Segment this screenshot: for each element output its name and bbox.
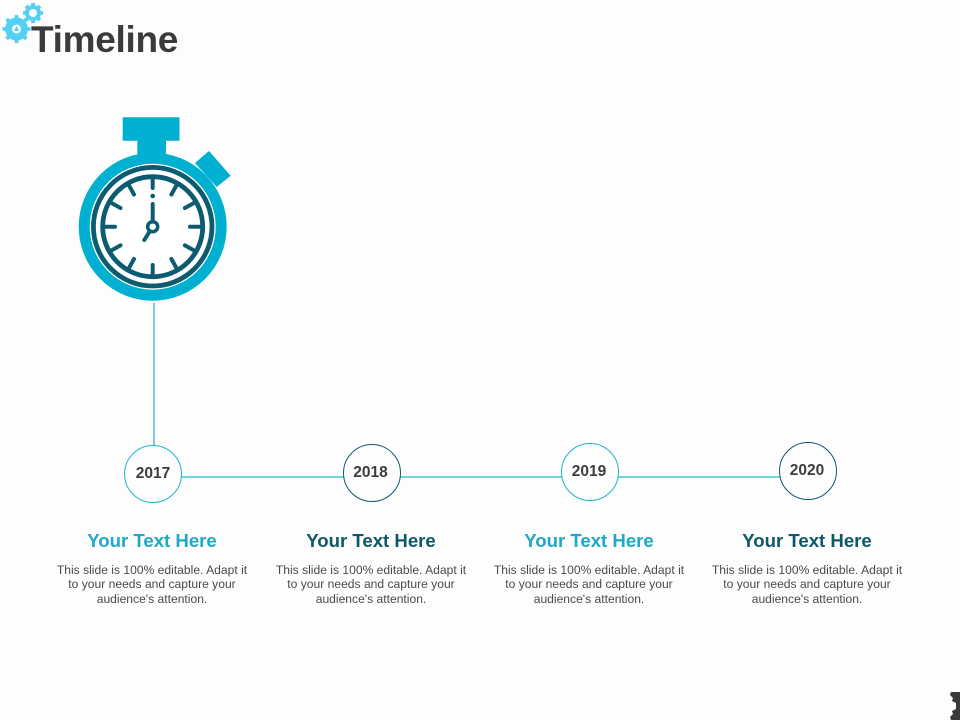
year 2020 xyxy=(779,442,837,500)
timeline line xyxy=(180,476,782,478)
text block 2018: to your needs and capture your xyxy=(287,577,455,591)
text block 2020: This slide is 100% editable. Adapt it xyxy=(712,563,902,577)
connector: stopwatch to 2017 xyxy=(153,303,155,446)
text block 2017: audience's attention. xyxy=(97,592,207,606)
text block 2018: audience's attention. xyxy=(316,592,426,606)
title: Timeline xyxy=(31,19,178,60)
text block 2019: audience's attention. xyxy=(534,592,644,606)
text block 2018: This slide is 100% editable. Adapt it xyxy=(276,563,466,577)
text block 2018: Your Text Here xyxy=(306,530,436,551)
text block 2020 xyxy=(712,530,902,606)
text block 2020: audience's attention. xyxy=(752,592,862,606)
text block 2019 xyxy=(494,530,684,606)
year 2017 xyxy=(124,445,182,503)
text block 2017 xyxy=(57,530,247,606)
year 2019 xyxy=(561,443,619,501)
text block 2019: This slide is 100% editable. Adapt it xyxy=(494,563,684,577)
icon: gears xyxy=(2,3,43,43)
text block 2019: Your Text Here xyxy=(524,530,654,551)
text block 2017: to your needs and capture your xyxy=(68,577,236,591)
year 2018: 2018 xyxy=(353,464,388,481)
text block 2020: to your needs and capture your xyxy=(723,577,891,591)
text block 2017: This slide is 100% editable. Adapt it xyxy=(57,563,247,577)
icon: stopwatch xyxy=(78,117,231,301)
year 2017: 2017 xyxy=(136,465,170,482)
corner gear mark xyxy=(950,692,960,720)
text block 2019: to your needs and capture your xyxy=(505,577,673,591)
text block 2018 xyxy=(276,530,466,606)
text block 2020: Your Text Here xyxy=(742,530,872,551)
year 2020: 2020 xyxy=(790,462,824,479)
text block 2017: Your Text Here xyxy=(87,530,217,551)
year 2019: 2019 xyxy=(572,463,606,480)
year 2018 xyxy=(343,444,401,502)
